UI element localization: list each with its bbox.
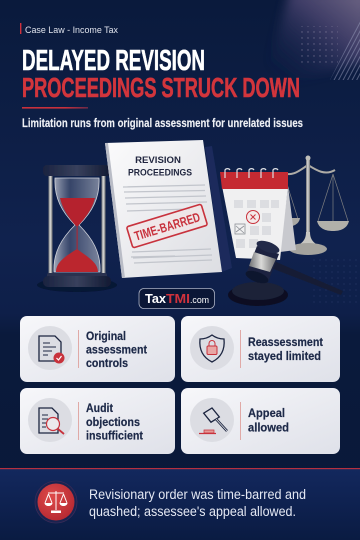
header tag: Case Law - Income Tax: Case Law - Income Tax (25, 25, 118, 36)
panel: original assessment controls (20, 316, 175, 382)
title: DELAYED REVISION (22, 45, 205, 77)
panel: reassessment stayed limited (181, 316, 340, 382)
card text (86, 401, 143, 442)
card text: stayed limited (248, 349, 321, 363)
title (22, 45, 300, 103)
card text: Reassessment (248, 335, 323, 349)
card text (248, 335, 323, 363)
document heading: REVISION (135, 155, 181, 166)
title underline (22, 107, 88, 109)
icon: document with magnifier (28, 398, 72, 442)
icon: scales of justice (282, 156, 349, 255)
card text: Audit (86, 401, 113, 415)
panel: conclusion footer (0, 468, 360, 540)
card text (248, 406, 289, 434)
logo: TaxTMI.com: .com (190, 295, 209, 306)
logo: TaxTMI.com: Tax (145, 292, 166, 306)
card text: controls (86, 356, 128, 370)
document heading (128, 155, 193, 178)
document: revision proceedings (105, 140, 222, 278)
logo: TaxTMI.com (139, 288, 214, 308)
card text: Original (86, 329, 126, 343)
icon: gavel (228, 238, 343, 306)
icon: gavel outline (190, 398, 234, 442)
card text: objections (86, 415, 140, 429)
conclusion text: quashed; assessee's appeal allowed. (89, 504, 296, 519)
illustration: legal hero (37, 140, 349, 306)
logo: TaxTMI.com: TMI (166, 292, 190, 306)
card text: assessment (86, 342, 147, 356)
card text (86, 329, 147, 370)
conclusion text: Revisionary order was time-barred and (89, 487, 306, 502)
panel: audit objections insufficient (20, 388, 175, 454)
icon: hourglass (37, 165, 117, 292)
icon: calendar (220, 169, 296, 260)
icon: document with check (28, 326, 72, 370)
card text: allowed (248, 420, 289, 434)
card text: insufficient (86, 428, 143, 442)
card text: Appeal (248, 406, 285, 420)
icon: folder behind document (205, 146, 232, 272)
document heading: PROCEEDINGS (128, 168, 193, 178)
icon: scales badge (35, 481, 77, 523)
stamp: time-barred: TIME-BARRED (132, 209, 202, 244)
conclusion text (89, 487, 306, 519)
panel: appeal allowed (181, 388, 340, 454)
icon: shield with lock (190, 326, 234, 370)
